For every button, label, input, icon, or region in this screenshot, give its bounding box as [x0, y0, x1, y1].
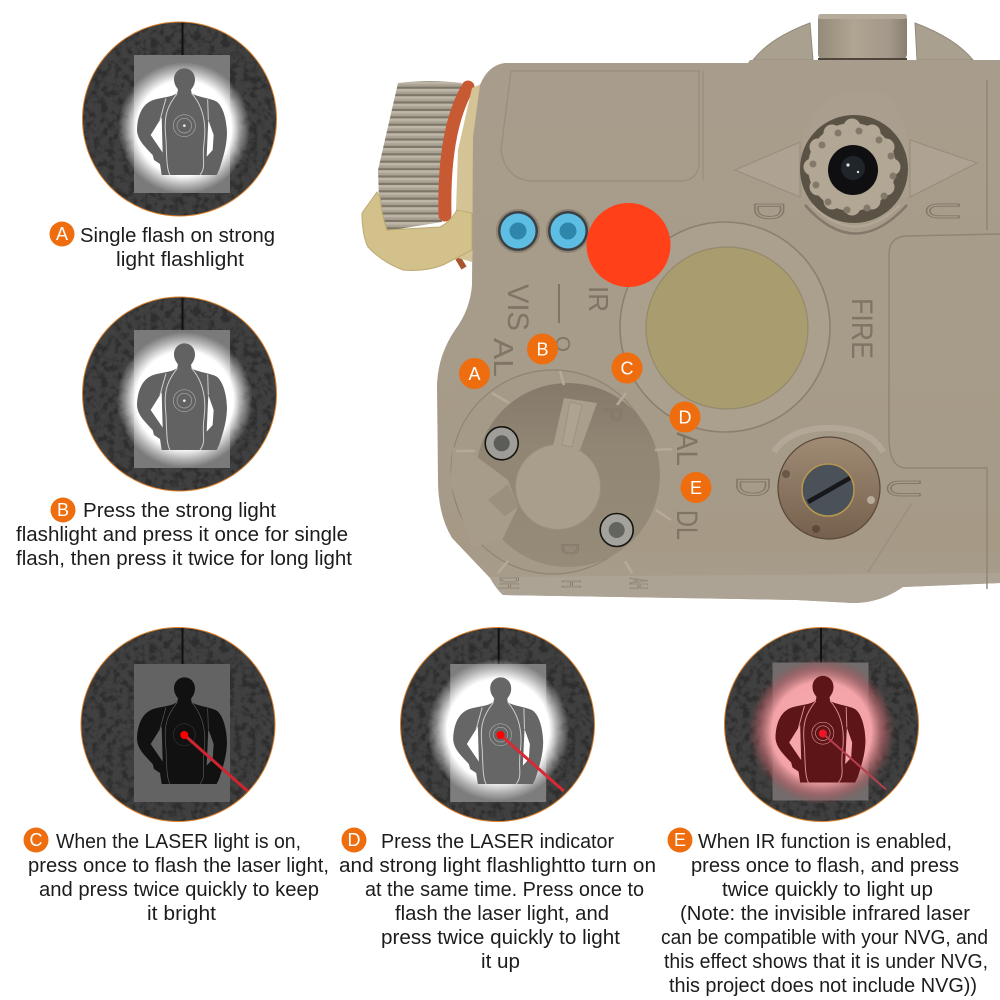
molded labels: DL — [670, 510, 703, 540]
badge C on device: C — [620, 358, 634, 378]
molded labels: AL — [488, 338, 519, 377]
caption E: press once to flash, and press — [691, 855, 959, 877]
caption B: flash, then press it twice for long light — [16, 548, 352, 570]
lower screw switch — [774, 428, 883, 539]
lens window — [620, 222, 830, 432]
badge E on device — [680, 472, 712, 503]
caption E: E — [674, 830, 686, 850]
caption E: this project does not include NVG)) — [669, 975, 977, 997]
molded labels — [488, 202, 969, 589]
molded labels: U — [878, 479, 930, 498]
target panel A — [82, 22, 277, 216]
caption B — [16, 498, 352, 570]
caption D — [339, 828, 656, 973]
device body — [437, 60, 1000, 603]
left wedge of dial — [450, 447, 518, 547]
badge D on device — [670, 402, 700, 432]
caption B: Press the strong light — [83, 500, 276, 522]
caption E — [661, 828, 988, 997]
top rotary switch — [735, 93, 977, 234]
device photo illustration — [362, 14, 1000, 603]
top mount and stem — [753, 14, 973, 60]
caption C: C — [30, 830, 42, 850]
lower body highlight strip — [490, 573, 1000, 603]
caption A — [50, 222, 275, 271]
caption B: flashlight and press it once for single — [16, 524, 348, 546]
caption E: (Note: the invisible infrared laser — [680, 903, 970, 925]
caption C: When the LASER light is on, — [56, 831, 301, 853]
caption D: at the same time. Press once to — [365, 879, 644, 901]
caption D: D — [348, 830, 360, 850]
molded labels: P — [599, 407, 626, 422]
target panel D — [400, 626, 595, 822]
caption A: light flashlight — [116, 249, 244, 271]
target panel C — [80, 626, 276, 822]
caption D: Press the LASER indicator — [381, 831, 614, 853]
badge A on device: A — [468, 364, 481, 384]
molded labels: D — [746, 202, 793, 220]
selector dial — [450, 370, 672, 574]
badge B on device: B — [536, 340, 549, 360]
molded labels: FIRE — [845, 298, 878, 359]
molded labels: O — [551, 336, 573, 352]
device photo illustration: DH — [494, 577, 524, 589]
caption D: flash the laser light, and — [395, 903, 609, 925]
caption E: When IR function is enabled, — [698, 831, 952, 853]
badge A on device — [459, 358, 490, 389]
device photo illustration: AH — [624, 578, 652, 589]
caption C — [24, 828, 329, 925]
molded labels: D — [556, 543, 583, 555]
caption C: and press twice quickly to keep — [39, 879, 319, 901]
caption E: can be compatible with your NVG, and — [661, 927, 988, 949]
tan band — [456, 82, 486, 262]
caption E: this effect shows that it is under NVG, — [664, 951, 988, 973]
red cover dot — [586, 203, 670, 287]
caption C: press once to flash the laser light, — [28, 855, 329, 877]
molded labels: IR — [583, 286, 614, 312]
caption C: it bright — [147, 903, 216, 925]
molded labels: VIS — [501, 284, 534, 331]
molded labels: D — [727, 477, 779, 497]
knurled knob — [378, 81, 462, 230]
selector knob — [516, 398, 600, 530]
badge D on device: D — [678, 408, 692, 428]
orange o-ring — [445, 87, 468, 215]
caption D: it up — [481, 951, 520, 973]
panel seams — [501, 71, 1000, 589]
blue screws — [496, 209, 590, 253]
molded labels: AL — [670, 432, 703, 466]
target panel B — [82, 296, 277, 492]
caption A: Single flash on strong — [80, 225, 275, 247]
device photo illustration: H — [556, 580, 586, 588]
target panel E — [724, 626, 919, 822]
caption E: twice quickly to light up — [722, 879, 933, 901]
caption B: B — [57, 500, 69, 520]
badge B on device — [527, 334, 558, 364]
badge E on device: E — [690, 478, 702, 498]
rubber loop strap — [362, 192, 472, 270]
molded labels: U — [917, 202, 969, 220]
caption A: A — [56, 224, 68, 244]
caption D: and strong light flashlightto turn on — [339, 855, 656, 877]
badge C on device — [612, 352, 642, 384]
caption D: press twice quickly to light — [381, 927, 620, 949]
